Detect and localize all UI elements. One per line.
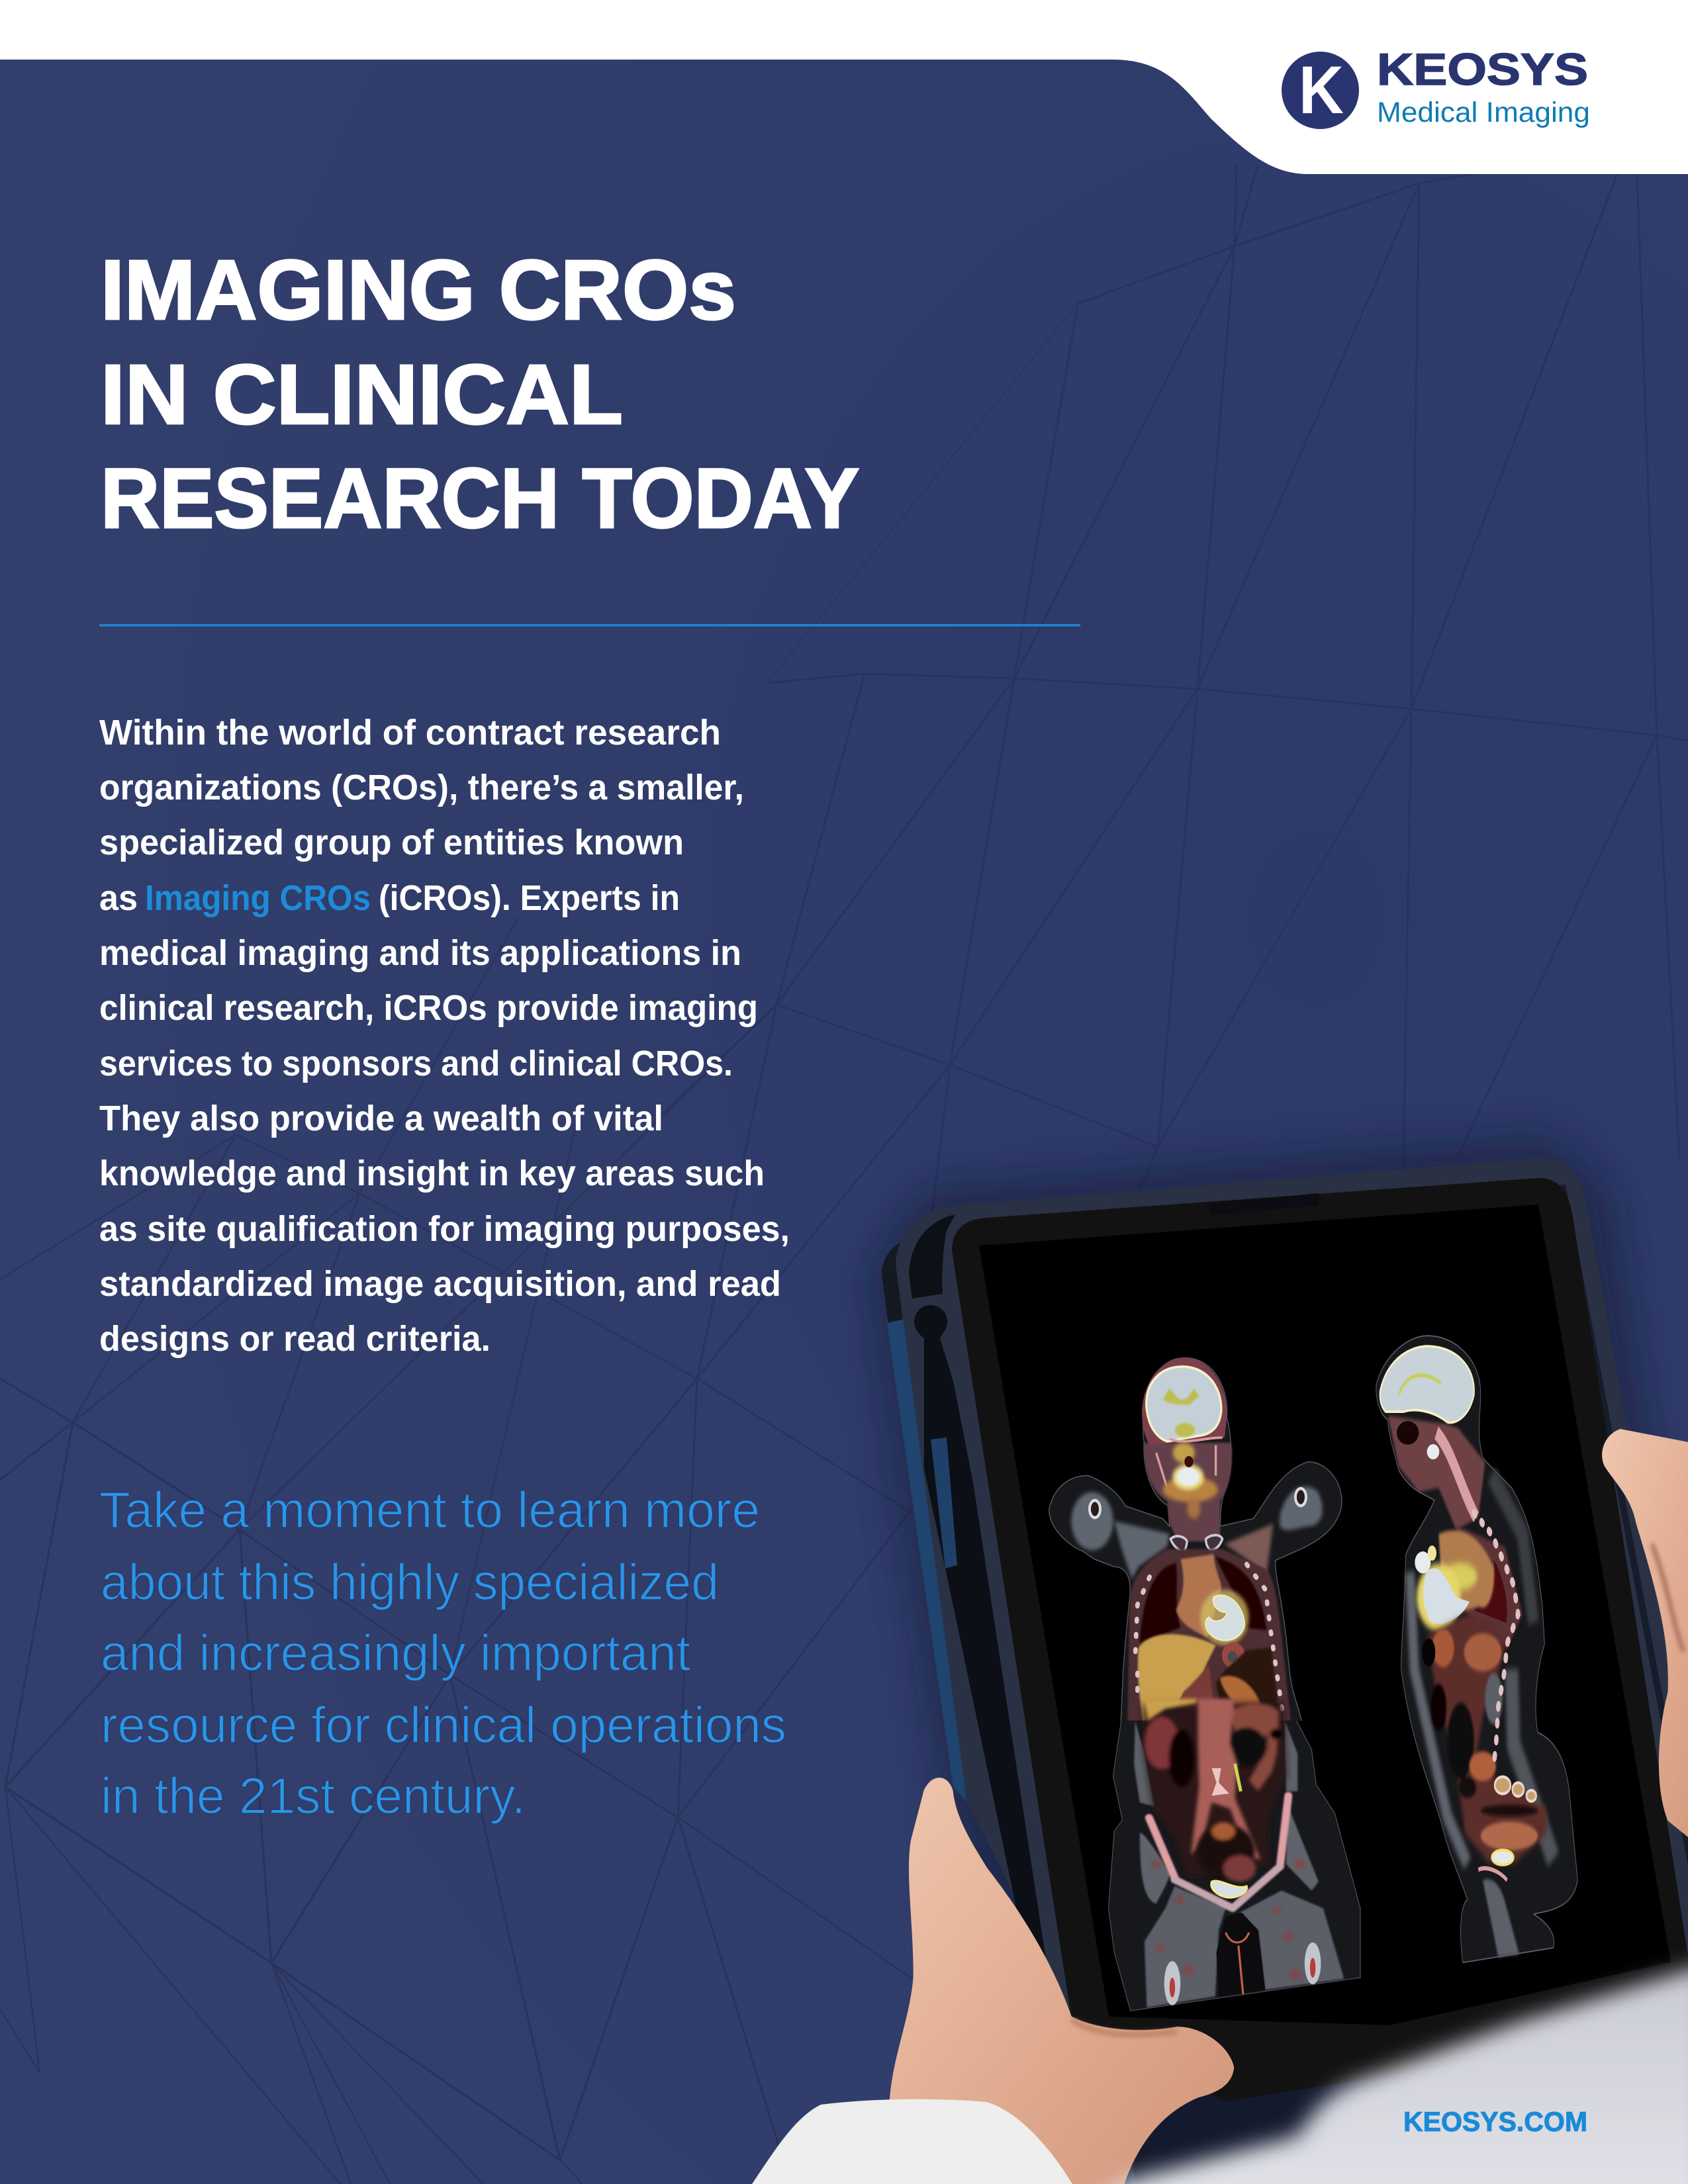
intro paragraph: medical imaging and its applications in xyxy=(99,933,741,973)
coronal vertebra xyxy=(1212,1768,1229,1796)
coronal pelvic cavity xyxy=(1197,1822,1256,1882)
scan: sagittal body view xyxy=(1376,1336,1577,1962)
intro paragraph xyxy=(99,713,790,1359)
intro paragraph: knowledge and insight in key areas such xyxy=(99,1154,765,1193)
sagittal sacrum xyxy=(1495,1777,1536,1801)
title: IMAGING CROs xyxy=(101,243,736,338)
sagittal mediastinum xyxy=(1438,1531,1494,1614)
sagittal brain xyxy=(1380,1346,1474,1422)
sagittal brain uptake xyxy=(1399,1375,1441,1395)
coronal face tissue xyxy=(1144,1443,1232,1541)
sagittal silhouette xyxy=(1376,1336,1577,1962)
logo circle mark: K xyxy=(1299,52,1344,128)
sagittal heart glow xyxy=(1444,1563,1477,1590)
case right dark edge xyxy=(1562,1185,1688,1952)
header cut-out with logo area xyxy=(0,0,1688,174)
coronal chest wall xyxy=(1127,1549,1291,1721)
sagittal back chest wall xyxy=(1456,1525,1523,1648)
coronal bowel loops xyxy=(1145,1704,1282,1792)
intro paragraph: as xyxy=(99,878,138,918)
coronal upper abdomen xyxy=(1172,1648,1280,1721)
white coat sleeve left xyxy=(752,2099,1072,2184)
scan: coronal lower body xyxy=(1108,1699,1360,2011)
coronal thighs xyxy=(1145,1886,1344,2007)
coronal heart xyxy=(1200,1590,1249,1645)
sagittal bowel details xyxy=(1431,1629,1538,1850)
title: IN CLINICAL xyxy=(101,347,623,442)
coronal liver xyxy=(1138,1634,1216,1721)
intro paragraph: Within the world of contract research xyxy=(99,713,721,752)
coronal arm bones xyxy=(1090,1488,1306,1518)
coronal arms tissue xyxy=(1071,1486,1323,1580)
sagittal lung xyxy=(1474,1559,1507,1623)
title: RESEARCH TODAY xyxy=(101,451,859,546)
call to action text: and increasingly important xyxy=(101,1625,690,1682)
sagittal airway xyxy=(1397,1421,1419,1445)
scan: coronal upper body xyxy=(1049,1358,1342,1721)
tablet bezel xyxy=(952,1178,1688,2101)
right hand finger shadow xyxy=(1652,1544,1683,1652)
tablet screen xyxy=(979,1205,1671,2025)
right hand xyxy=(1602,1429,1688,1868)
coronal lower silhouette xyxy=(1108,1721,1360,2011)
tablet notch xyxy=(1207,1193,1319,1215)
title xyxy=(101,243,859,546)
case rail frame xyxy=(896,1158,1688,2163)
intro paragraph: specialized group of entities known xyxy=(99,823,684,862)
sagittal air pocket xyxy=(1422,1639,1435,1666)
coronal ureter xyxy=(1235,1764,1241,1792)
case blue felt xyxy=(887,1319,974,1810)
coronal neck uptake xyxy=(1163,1443,1218,1519)
coronal central column xyxy=(1191,1699,1260,1860)
sagittal body wall tissue xyxy=(1410,1475,1554,1864)
sagittal spine xyxy=(1474,1513,1518,1764)
coronal stomach xyxy=(1222,1642,1245,1668)
intro paragraph: services to sponsors and clinical CROs. xyxy=(99,1044,733,1083)
thumb crease shadow xyxy=(1072,2020,1177,2034)
coronal groin vessels xyxy=(1226,1933,1249,1994)
coronal clavicle rings xyxy=(1170,1535,1223,1551)
coronal trachea xyxy=(1184,1456,1194,1467)
coronal jaw bones xyxy=(1156,1437,1223,1488)
intro paragraph: clinical research, iCROs provide imaging xyxy=(99,988,758,1028)
intro paragraph: organizations (CROs), there’s a smaller, xyxy=(99,768,744,807)
coronal neck hot spot xyxy=(1177,1468,1199,1486)
coronal side tissue xyxy=(1134,1721,1297,1807)
sagittal leg xyxy=(1483,1879,1519,1957)
coronal brain uptake xyxy=(1163,1388,1199,1437)
coronal abdomen xyxy=(1143,1703,1286,1878)
sagittal cervical spine xyxy=(1436,1433,1476,1518)
logo wordmark: KEOSYS xyxy=(1377,44,1588,95)
coronal femurs xyxy=(1164,1942,1321,2005)
sagittal pubis xyxy=(1478,1868,1507,1880)
case blue strip xyxy=(931,1437,957,1569)
coronal mediastinum xyxy=(1176,1554,1221,1638)
intro paragraph: designs or read criteria. xyxy=(99,1319,491,1359)
call to action text: resource for clinical operations xyxy=(101,1697,786,1754)
logo circle mark xyxy=(1282,52,1359,129)
title divider xyxy=(99,624,1080,626)
logo tagline: Medical Imaging xyxy=(1377,97,1590,128)
intro paragraph: (iCROs). Experts in xyxy=(379,878,680,918)
sagittal face tissue xyxy=(1388,1416,1485,1530)
intro paragraph: Imaging CROs xyxy=(145,878,371,918)
coronal upper silhouette xyxy=(1049,1358,1342,1721)
intro paragraph: as site qualification for imaging purposes, xyxy=(99,1209,790,1249)
logo: Keosys Medical Imaging xyxy=(1282,44,1590,129)
case back flap xyxy=(882,1243,910,1324)
sagittal abdomen xyxy=(1428,1614,1547,1864)
call to action text xyxy=(99,1482,786,1825)
intro paragraph: standardized image acquisition, and read xyxy=(99,1264,781,1304)
call to action text: in the 21st century. xyxy=(101,1768,526,1825)
photo: hands holding tablet with PET/CT scan xyxy=(752,1138,1688,2184)
coronal groin xyxy=(1217,1913,1265,1997)
coronal brain xyxy=(1147,1367,1221,1441)
left hand xyxy=(890,1778,1234,2184)
coronal bladder xyxy=(1211,1881,1247,1897)
blurred white coat foreground xyxy=(1086,1964,1688,2184)
call to action text: about this highly specialized xyxy=(101,1554,719,1611)
coronal liver lower edge xyxy=(1143,1699,1198,1721)
coronal pelvis bones xyxy=(1149,1796,1288,1908)
coronal ribs xyxy=(1135,1565,1282,1709)
sagittal neck spot xyxy=(1427,1444,1439,1459)
coronal lungs xyxy=(1140,1557,1266,1643)
coronal hip muscle xyxy=(1140,1807,1319,1904)
pencil hole and slot xyxy=(914,1305,1046,1959)
sagittal heart xyxy=(1415,1545,1470,1631)
intro paragraph: They also provide a wealth of vital xyxy=(99,1099,663,1138)
website link: KEOSYS.COM xyxy=(1403,2106,1587,2137)
tablet shadow xyxy=(871,1138,1688,2184)
call to action text: Take a moment to learn more xyxy=(99,1482,760,1539)
pencil slot top xyxy=(909,1214,955,1298)
coronal skull xyxy=(1142,1358,1227,1445)
sagittal bladder xyxy=(1491,1850,1514,1865)
coronal speckle xyxy=(1151,1858,1306,1980)
case lower band xyxy=(1119,2045,1688,2184)
tablet case xyxy=(882,1158,1688,2184)
